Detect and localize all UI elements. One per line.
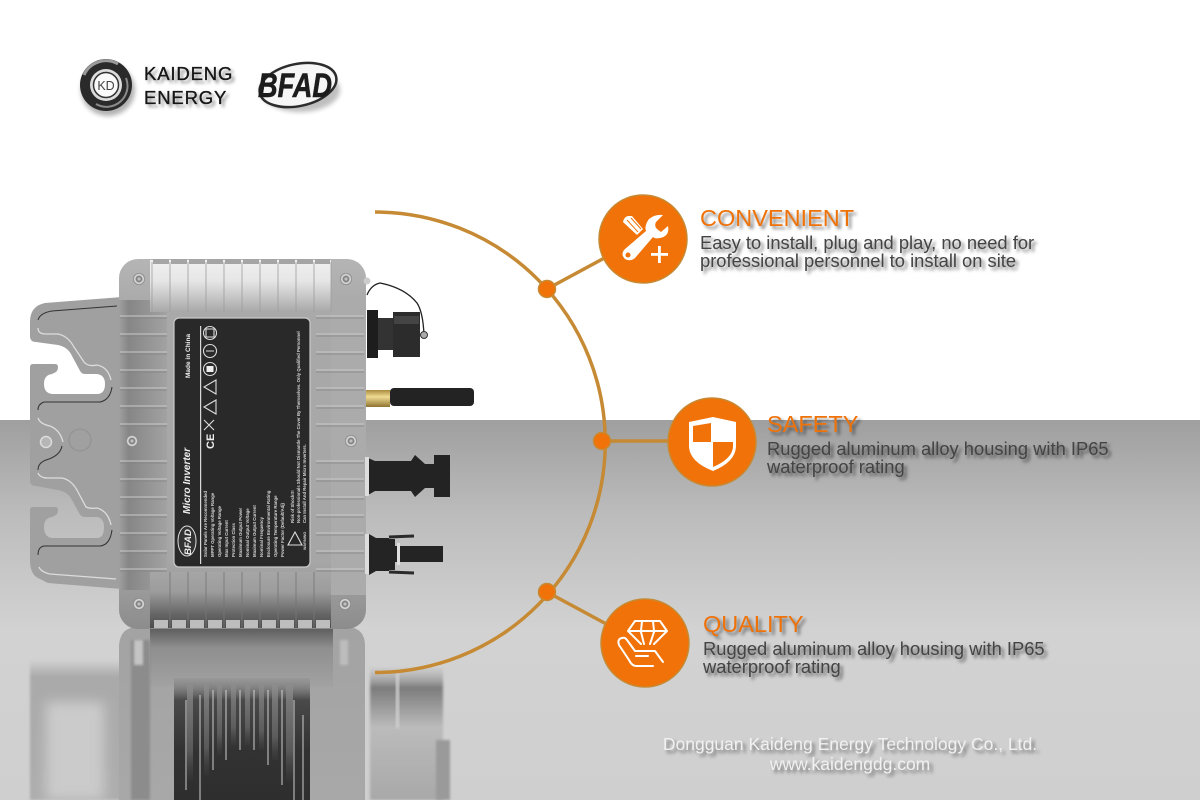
product label: BFAD: [183, 529, 194, 555]
logo wordmark: KAIDENG: [144, 63, 233, 84]
heading: safety: SAFETY: [767, 411, 858, 437]
product label: Nominal Frequency: [259, 517, 264, 557]
product label: Operating Voltage Range: [217, 505, 222, 557]
text: quality description: [703, 638, 1049, 682]
product label: Enclosure Environmental Rating: [266, 490, 271, 557]
body: [119, 259, 366, 629]
heading: convenient: CONVENIENT: [700, 205, 854, 231]
product label: [174, 318, 310, 567]
product label: MPPT Operating Voltage Range: [210, 492, 215, 557]
product label: Can Install And Repair Micro Inverters.: [302, 444, 307, 523]
connector lines: [547, 255, 670, 626]
solar connector one: [365, 455, 450, 497]
bolts: [126, 273, 357, 610]
text: safety description: Rugged aluminum alloy housing with IP65: [767, 438, 1109, 459]
text: convenient description: professional personnel to install on site: [700, 250, 1016, 271]
top connector: [364, 278, 428, 358]
footer company info: [663, 734, 1040, 778]
mounting plate: [30, 297, 122, 589]
logo: BFAD: BFAD: [258, 66, 332, 105]
text: safety description: waterproof rating: [767, 456, 905, 477]
text: quality description: Rugged aluminum alloy housing with IP65: [703, 638, 1045, 659]
product label: Solar Panels Are Recommended: [203, 491, 208, 557]
feature: safety: [767, 411, 1112, 482]
text: convenient description: Easy to install, plug and play, no need for: [700, 232, 1034, 253]
product label: Max Input Current: [224, 520, 229, 557]
device reflection: [30, 627, 450, 800]
product label: Power Factor (Default/Adj): [280, 502, 285, 557]
logo wordmark: [144, 63, 236, 110]
feature: quality: [703, 611, 1049, 682]
icon: safety shield: [668, 398, 756, 486]
text: convenient description: [700, 232, 1038, 276]
product label: Risk of Shock!!!: [290, 490, 295, 523]
icon: quality gem in hand: [601, 599, 689, 687]
product label: Maximum Output Current: [252, 505, 257, 557]
text: safety description: [767, 438, 1112, 482]
text: quality description: waterproof rating: [703, 656, 841, 677]
logo wordmark: ENERGY: [144, 87, 227, 108]
product label: Protection Class: [231, 522, 236, 557]
footer company info: Dongguan Kaideng Energy Technology Co., Ltd.: [663, 734, 1037, 754]
side fins: [120, 316, 364, 569]
background floor: [0, 420, 1200, 800]
feature: convenient: [700, 205, 1038, 276]
icon: convenient tools: [599, 195, 687, 283]
bottom rib lines: [170, 572, 314, 628]
footer company info: www.kaidengdg.com: [770, 754, 930, 774]
product label: Operating Temperature Range: [273, 495, 278, 557]
product label: CE: [205, 434, 217, 449]
heading: quality: QUALITY: [703, 611, 804, 637]
antenna: [366, 388, 474, 407]
logo: KD emblem: [80, 59, 135, 116]
solar connector two: [365, 534, 443, 575]
product label: Non-professionals Should Not Dismantle The Cover By Themselves. Only Qualified Personnel: [296, 331, 301, 523]
product label: Maximum Output Power: [238, 507, 243, 557]
node dots: [538, 280, 610, 600]
product label: Made in China: [185, 334, 192, 378]
logo: KD emblem: KD: [97, 79, 115, 93]
product label: Micro Inverter: [182, 447, 193, 514]
top rib lines: [152, 262, 331, 312]
logo: BFAD: [255, 56, 341, 114]
micro inverter product: [30, 259, 474, 629]
main arc: [375, 212, 605, 672]
plate emboss lines: [38, 306, 117, 555]
product label: Nominal Output Voltage: [245, 508, 250, 557]
product label: WARNING: [303, 532, 307, 550]
